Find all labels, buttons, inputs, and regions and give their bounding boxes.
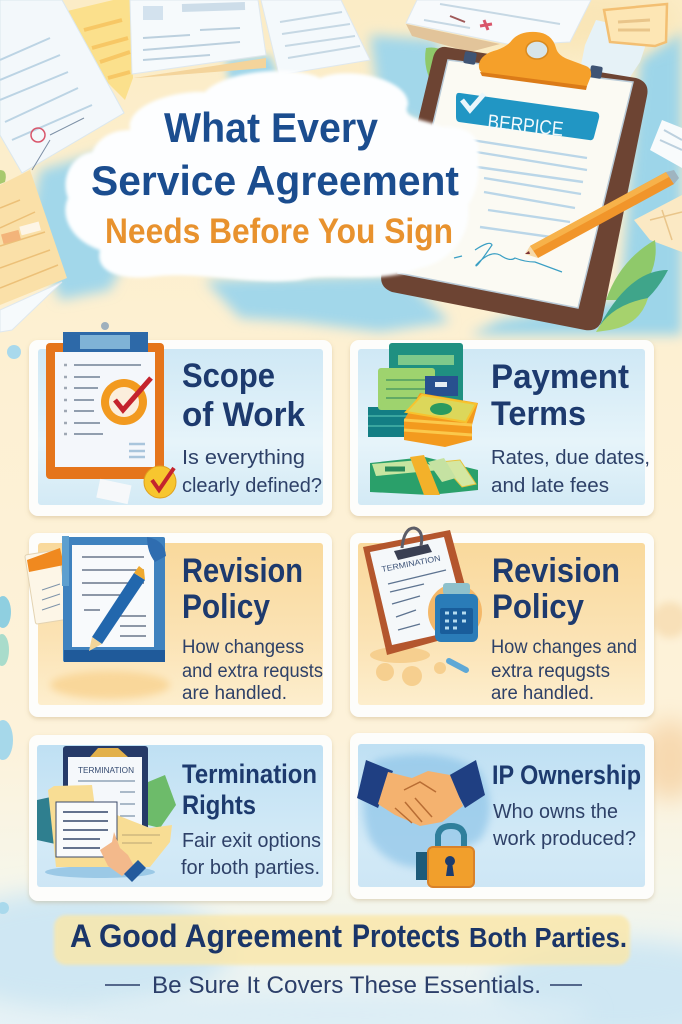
footer headline: Both Parties. [469, 922, 627, 953]
panel: scope of work [29, 322, 332, 516]
orange clip [463, 32, 603, 90]
description: Fair exit options [182, 830, 321, 852]
heading: Termination [182, 759, 317, 789]
panel: termination rights: Rights [182, 790, 256, 820]
description: Rates, due dates, [491, 447, 650, 469]
icon: clipboard and calculator: TERMINATION [381, 554, 442, 574]
icon: clipboard with target check [46, 322, 176, 504]
panel: revision policy right: Policy [492, 588, 584, 626]
description: are handled. [491, 683, 594, 704]
icon: back leaves [425, 48, 668, 332]
panel: revision policy left: Policy [182, 588, 270, 626]
board [381, 47, 648, 330]
panel: termination rights [29, 735, 332, 901]
title: Needs Before You Sign [105, 212, 453, 251]
description [491, 637, 637, 704]
icon: notepad and pen [25, 536, 166, 662]
panel: payment terms: Terms [491, 395, 586, 433]
description: clearly defined? [182, 475, 322, 497]
heading: IP Ownership [492, 760, 641, 790]
description: and late fees [491, 475, 609, 497]
description: How changes and [491, 637, 637, 658]
footer banner [54, 915, 630, 965]
icon: money stacks [368, 343, 478, 495]
watercolour blot [50, 671, 170, 699]
icon: termination documents [37, 746, 176, 882]
description: work produced? [492, 828, 636, 850]
panel: scope of work: of Work [182, 396, 305, 434]
description: Is everything [182, 447, 305, 469]
service label: BERPICE [486, 111, 564, 141]
pencil [525, 170, 679, 258]
scattered paper documents [0, 0, 682, 332]
paper sheet [398, 60, 633, 308]
panel: revision policy right [350, 528, 654, 717]
panel: ip ownership [350, 733, 654, 899]
title: Service Agreement [91, 157, 459, 204]
clipboard illustration [381, 32, 679, 332]
description [181, 830, 321, 879]
signature [454, 243, 562, 272]
description [182, 447, 322, 497]
footer tagline: Be Sure It Covers These Essentials. [152, 972, 541, 999]
panel: revision policy left [25, 533, 332, 717]
heading: Revision [182, 552, 303, 590]
icon: handshake [357, 760, 485, 826]
description [492, 801, 636, 850]
title cloud [65, 71, 479, 281]
heading: Payment [491, 358, 629, 396]
footer headline: Protects [352, 918, 460, 954]
title [91, 104, 459, 251]
description: Who owns the [493, 801, 618, 823]
icon: clipboard and calculator [363, 528, 482, 686]
description [491, 447, 650, 497]
heading: Revision [492, 552, 620, 590]
paper text lines [452, 137, 587, 238]
footer headline [70, 918, 627, 954]
description [182, 637, 323, 704]
description: How changess [182, 637, 304, 658]
footer headline: A Good Agreement [70, 918, 342, 954]
title: What Every [164, 104, 379, 151]
description: are handled. [182, 683, 287, 704]
description: and extra requsts [182, 661, 323, 682]
panel: payment terms [350, 340, 654, 516]
service label [456, 93, 599, 141]
heading: Scope [182, 357, 275, 395]
icon: termination documents: TERMINATION [78, 766, 134, 775]
watercolour blob [364, 754, 490, 868]
description: extra requgsts [491, 661, 610, 682]
icon: padlock [416, 826, 474, 887]
description: for both parties. [181, 857, 320, 879]
